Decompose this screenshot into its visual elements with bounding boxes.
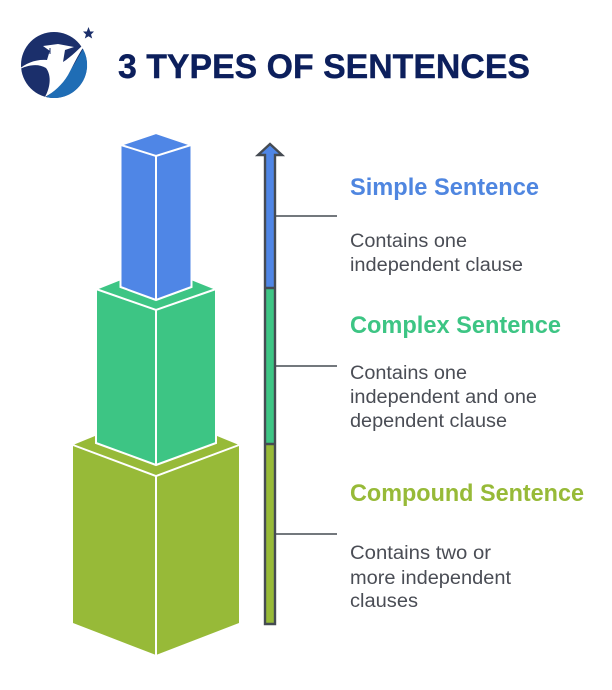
connector: simple (276, 215, 337, 217)
text: simple description: Contains one (350, 231, 467, 252)
green block (96, 265, 216, 465)
blue block (120, 133, 192, 300)
logo (18, 27, 94, 98)
text: complex description: independent and one (350, 387, 537, 408)
text: simple description: independent clause (350, 255, 523, 276)
text: compound description: more independent (350, 568, 512, 589)
arrow scale (258, 144, 282, 624)
connector: compound (276, 533, 337, 535)
text: complex description: dependent clause (350, 411, 507, 432)
text: simple description (350, 231, 523, 276)
text: compound description: clauses (350, 591, 418, 612)
heading: simple sentence: Simple Sentence (350, 174, 539, 201)
heading: complex sentence: Complex Sentence (350, 312, 561, 339)
stacked blocks (73, 133, 239, 655)
text: complex description (350, 363, 537, 432)
text: compound description: Contains two or (350, 543, 492, 564)
title: 3 TYPES OF SENTENCES (118, 48, 530, 86)
text: compound description (350, 543, 512, 612)
olive block (73, 411, 239, 655)
text: complex description: Contains one (350, 363, 467, 384)
connector: complex (276, 365, 337, 367)
heading: compound sentence: Compound Sentence (350, 480, 584, 507)
